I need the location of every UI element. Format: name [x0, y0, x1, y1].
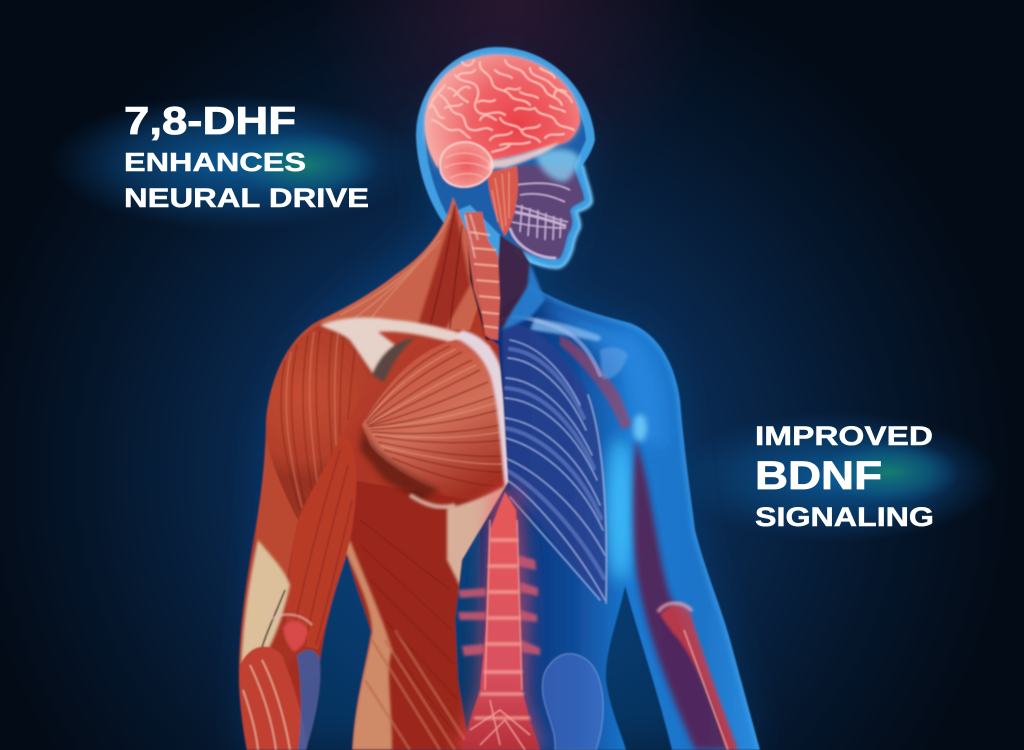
outer rim light [528, 283, 760, 750]
torso dark red muscle [350, 481, 466, 617]
pale abdominal tendon [447, 483, 510, 590]
torso fibres [360, 520, 460, 740]
head inner shading [425, 58, 586, 259]
callout: improved BDNF signaling [755, 421, 934, 532]
upper arm biceps [285, 432, 356, 650]
vertebra bright discs [474, 540, 530, 718]
pale flank [345, 540, 392, 750]
glowing spine [455, 490, 545, 750]
halo around the body [240, 47, 760, 750]
transparent blue torso and arm [470, 270, 770, 750]
bright side glow [605, 438, 635, 582]
heading: 7,8-DHF: 7,8-DHF [124, 100, 296, 143]
upper arm red vessel [560, 335, 632, 430]
translucent ribcage [498, 317, 606, 603]
label: neural drive: NEURAL DRIVE [124, 183, 369, 213]
neck muscle under brain [488, 166, 518, 236]
triceps outer [256, 446, 298, 576]
transverse processes [458, 555, 540, 656]
elbow pale tendon [241, 540, 290, 665]
pectoral shadow [360, 425, 440, 500]
glow behind left text [50, 94, 420, 230]
eye socket [535, 149, 580, 182]
brain [425, 55, 580, 187]
brain stem [488, 142, 560, 170]
elbow joint glow [283, 621, 308, 651]
teeth and jaw [510, 183, 570, 258]
cervical spine [465, 212, 500, 340]
callout: 7,8-DHF enhances neural drive [124, 100, 369, 213]
head and skull [416, 47, 595, 340]
forearm muscle [239, 646, 308, 750]
cerebrum [425, 55, 580, 168]
muscular half of the body [230, 190, 520, 750]
vertebral column [462, 492, 540, 750]
heading: BDNF: BDNF [755, 454, 882, 498]
glow behind right text [670, 412, 1000, 542]
muscle base [230, 190, 520, 750]
spine glow [455, 490, 545, 750]
brain folds [430, 60, 574, 152]
label: improved: IMPROVED [755, 421, 933, 451]
sternum tendon [455, 330, 512, 490]
human figure illustration [230, 47, 770, 750]
label: enhances: ENHANCES [124, 147, 306, 177]
cerebellum [440, 142, 493, 187]
deltoid [271, 325, 353, 519]
pelvis [542, 654, 603, 750]
sacrum nerves [470, 700, 530, 750]
forearm muscle [633, 440, 735, 750]
collarbone tendon [320, 317, 470, 374]
label: signaling: SIGNALING [755, 502, 934, 532]
head outer blue shell [416, 47, 595, 320]
vertical column highlights [485, 520, 522, 690]
forearm translucent part [297, 650, 322, 750]
face rim light [515, 165, 592, 268]
brain glow [425, 55, 580, 170]
neck front [495, 235, 530, 330]
shoulder highlight [535, 290, 665, 450]
forearm bone [660, 605, 738, 750]
dark neck gap [467, 244, 492, 341]
neck trapezius [320, 197, 480, 330]
collarbone [530, 318, 601, 341]
pectoral muscle [362, 340, 508, 495]
